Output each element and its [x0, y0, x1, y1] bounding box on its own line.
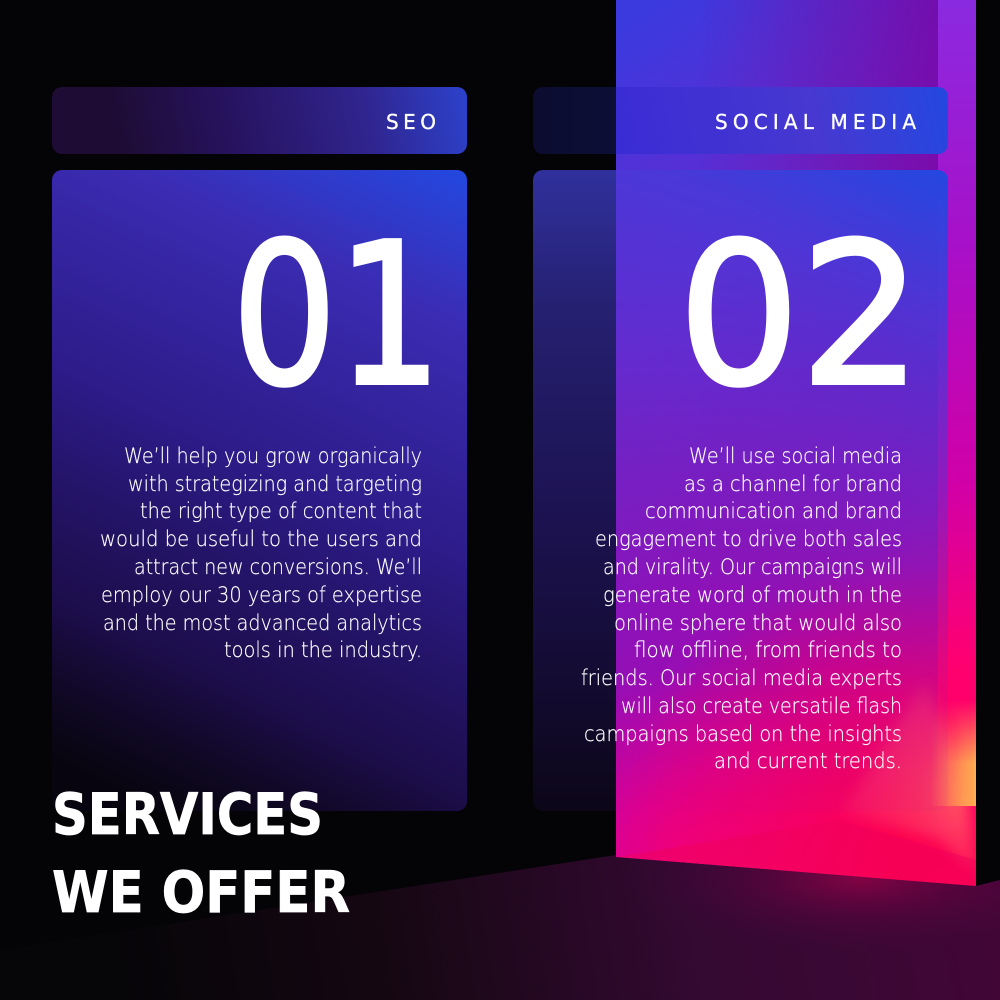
text block: social media description: engagement to drive both sales — [595, 527, 902, 551]
text block: social media description: generate word of mouth in the — [603, 583, 902, 607]
label: SOCIAL MEDIA: SOCIAL MEDIA — [715, 110, 916, 134]
text block: social media description: friends. Our social media experts — [581, 666, 902, 690]
panel: social media card — [533, 170, 948, 811]
text block: social media description — [581, 444, 902, 773]
panel: SEO card — [52, 170, 467, 811]
text block: SEO description: the right type of content that — [140, 499, 422, 523]
panel: SEO label bar — [52, 87, 467, 154]
text block: social media description: as a channel for brand — [684, 472, 902, 496]
text block: social media description: online sphere that would also — [614, 611, 902, 635]
title: SERVICES — [52, 782, 323, 848]
text block: SEO description — [100, 444, 422, 662]
text block: social media description: campaigns based on the insights — [584, 722, 902, 746]
text block: social media description: flow offline, from friends to — [634, 638, 902, 662]
text block: SEO description: with strategizing and targeting — [128, 472, 422, 496]
text block: social media description: will also create versatile flash — [621, 694, 902, 718]
text block: SEO description: employ our 30 years of expertise — [101, 583, 422, 607]
text block: SEO description: tools in the industry. — [224, 638, 422, 662]
title — [52, 782, 350, 926]
text block: social media description: We’ll use social media — [689, 444, 902, 468]
number 01: 01 — [232, 202, 442, 430]
text block: social media description: communication and brand — [645, 499, 902, 523]
text block: social media description: and virality. Our campaigns will — [603, 555, 902, 579]
floor — [0, 855, 1000, 1000]
text block: SEO description: We’ll help you grow organically — [124, 444, 422, 468]
text block: social media description: and current trends. — [714, 749, 902, 773]
title: WE OFFER — [52, 860, 350, 926]
text block: SEO description: would be useful to the users and — [100, 527, 422, 551]
text block: SEO description: and the most advanced analytics — [103, 611, 422, 635]
panel: social media label bar — [533, 87, 948, 154]
light window — [616, 0, 976, 890]
label: SEO: SEO — [386, 110, 436, 134]
text block: SEO description: attract new conversions. We’ll — [134, 555, 422, 579]
number 02: 02 — [678, 202, 922, 430]
